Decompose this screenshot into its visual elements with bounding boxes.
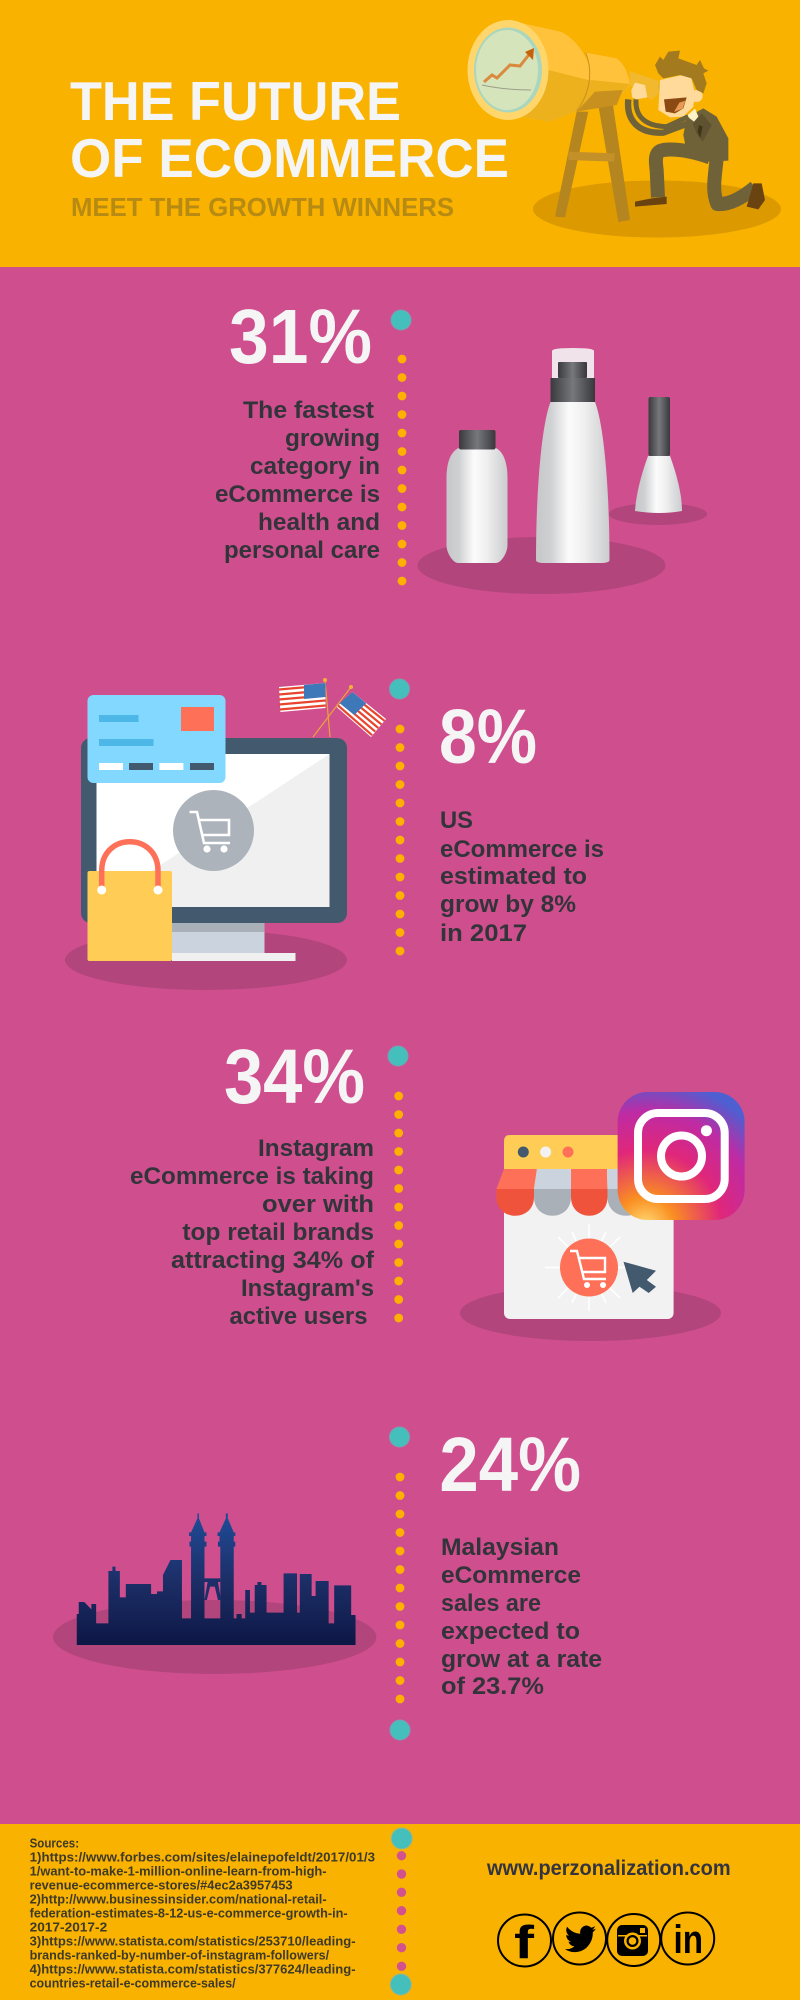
text block: fastest growing category [215, 397, 380, 564]
timeline dots 1 [391, 310, 411, 585]
text block: Instagram eCommerce: active users [230, 1303, 368, 1330]
icon: storefront with cart [460, 1135, 721, 1341]
text block: fastest growing category: The fastest [243, 397, 374, 424]
text block: Instagram eCommerce: eCommerce is taking [130, 1163, 374, 1190]
website url: www.perzonalization.com [486, 1857, 731, 1880]
icon: linkedin [661, 1912, 714, 1964]
icon: facebook: f [514, 1916, 535, 1968]
text block: Instagram eCommerce [130, 1135, 375, 1330]
footer panel [0, 1824, 800, 2000]
text block: Instagram eCommerce: Instagram [258, 1135, 374, 1162]
text block: Malaysian growth: Malaysian [441, 1534, 559, 1561]
text block: US growth: estimated to [440, 863, 587, 890]
social icons [498, 1912, 714, 1968]
icon: cosmetic bottles [418, 348, 707, 594]
stat: 31%: 31% [229, 294, 372, 380]
sources list: countries-retail-e-commerce-sales/ [30, 1977, 236, 1991]
sources list: 2)http://www.businessinsider.com/national-retail- [30, 1893, 327, 1907]
timeline dots 2 [390, 679, 410, 955]
text block: US growth: grow by 8% [440, 891, 576, 918]
icon: linkedin: in [674, 1918, 703, 1962]
text block: Malaysian growth: eCommerce [441, 1562, 581, 1589]
text block: US growth: eCommerce is [440, 836, 604, 863]
icon: American flags [279, 678, 386, 737]
icon: facebook [498, 1914, 551, 1968]
sources list: Sources: [30, 1836, 79, 1850]
sources list: brands-ranked-by-number-of-instagram-followers/ [30, 1949, 330, 1963]
sources list [30, 1836, 375, 1991]
stat: 34%: 34% [224, 1034, 365, 1120]
sources list: 1/want-to-make-1-million-online-learn-from-high- [30, 1865, 327, 1879]
title: OF ECOMMERCE [70, 127, 509, 189]
icon: Instagram logo [618, 1092, 745, 1220]
text block: fastest growing category: personal care [224, 537, 380, 564]
text block: Malaysian growth: expected to [441, 1618, 580, 1645]
sources list: 2017-2017-2 [30, 1921, 107, 1935]
timeline dots 3 [388, 1046, 408, 1322]
text block: US growth: in 2017 [440, 920, 527, 947]
section 1: health and personal care [215, 294, 707, 594]
text block: Instagram eCommerce: over with [262, 1191, 374, 1218]
text block: Malaysian growth [441, 1534, 602, 1700]
text block: Malaysian growth: sales are [441, 1590, 541, 1617]
subtitle: MEET THE GROWTH WINNERS [71, 192, 454, 222]
text block: Malaysian growth: grow at a rate [441, 1646, 602, 1673]
sources list: 3)https://www.statista.com/statistics/253710/leading- [30, 1935, 356, 1949]
text block: fastest growing category: health and [258, 509, 380, 536]
illustration: man with telescope [468, 19, 781, 238]
text block: Instagram eCommerce: attracting 34% of [171, 1247, 375, 1274]
title: THE FUTURE [70, 70, 401, 132]
text block: fastest growing category: growing [285, 425, 380, 452]
text block: fastest growing category: category in [250, 453, 380, 480]
header panel [0, 0, 800, 267]
section 4: Malaysian eCommerce [53, 1422, 602, 1740]
text block: Instagram eCommerce: Instagram's [241, 1275, 374, 1302]
icon: monitor with cart, card and bag [65, 695, 347, 990]
text block: US growth: US [440, 807, 473, 834]
text block: Malaysian growth: of 23.7% [441, 1673, 544, 1700]
text block: fastest growing category: eCommerce is [215, 481, 380, 508]
timeline dots footer [390, 1828, 412, 1995]
sources list: revenue-ecommerce-stores/#4ec2a3957453 [30, 1879, 293, 1893]
sources list: federation-estimates-8-12-us-e-commerce-growth-in- [30, 1907, 348, 1921]
sources list: 1)https://www.forbes.com/sites/elainepofeldt/2017/01/3 [30, 1851, 375, 1865]
sources list: 4)https://www.statista.com/statistics/377624/leading- [30, 1963, 356, 1977]
icon: Kuala Lumpur skyline [53, 1513, 376, 1674]
section 2: US eCommerce [65, 678, 604, 990]
section 3: Instagram eCommerce [130, 1034, 745, 1341]
title [70, 70, 509, 189]
stat: 8%: 8% [439, 694, 537, 780]
timeline dots 4 [390, 1427, 410, 1740]
icon: instagram [607, 1914, 660, 1966]
text block: Instagram eCommerce: top retail brands [182, 1219, 374, 1246]
icon: twitter [553, 1912, 606, 1964]
stat: 24%: 24% [439, 1422, 581, 1508]
text block: US growth [440, 807, 604, 947]
